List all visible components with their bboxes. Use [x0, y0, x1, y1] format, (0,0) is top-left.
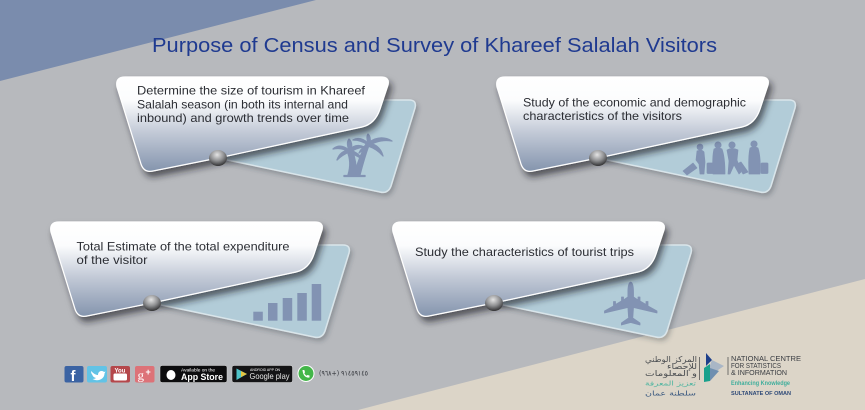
front panel [51, 222, 322, 316]
icon: facebook: f [70, 368, 76, 385]
text: tourism size: Salalah season (in both its internal and [137, 98, 348, 112]
icon: palm trees [333, 134, 392, 176]
knob [589, 150, 607, 166]
background corner: beige triangle [358, 279, 865, 410]
icon: google plus: + [146, 367, 151, 377]
text: visitor expenditure: of the visitor [76, 254, 148, 267]
background corner: blue triangle [0, 0, 316, 81]
text: tourist trips: Study the characteristics of tourist trips [415, 246, 634, 259]
panel: tourist trips [393, 222, 691, 337]
icon: youtube: You [114, 368, 126, 374]
title: Purpose of Census and Survey of Khareef Salalah Visitors [152, 35, 717, 57]
logo: English name [731, 354, 801, 377]
panel: tourism size [117, 77, 415, 192]
back panel [494, 245, 691, 337]
logo: Arabic tagline: تعزيز المعرفة [645, 380, 696, 388]
text: visitor characteristics: characteristics of the visitors [523, 110, 682, 123]
badge: google play: Google play [250, 371, 290, 381]
logo: emblem [700, 353, 728, 382]
icon: google plus: g [138, 368, 144, 382]
badge: app store [160, 366, 227, 382]
badge: google play: ANDROID APP ON [250, 368, 281, 372]
front panel [117, 77, 388, 171]
front panel [497, 77, 768, 171]
knob [143, 295, 161, 311]
text: visitor characteristics: Study of the economic and demographic [523, 96, 746, 110]
knob [485, 295, 503, 311]
logo: English name: NATIONAL CENTRE [731, 354, 801, 363]
logo: English name: & INFORMATION [731, 368, 787, 377]
icon: bar chart [253, 284, 321, 321]
contact number: (٩٦٨+) ٩١٤٥٩١٤٥ [319, 370, 368, 378]
badge: app store: Available on the [181, 368, 215, 374]
panel: visitor expenditure [51, 222, 349, 337]
back panel [152, 245, 349, 337]
icon: google plus [135, 366, 154, 382]
text: tourism size: Determine the size of tourism in Khareef [137, 84, 366, 98]
text: tourism size: inbound) and growth trends over time [137, 112, 349, 125]
logo: English name: FOR STATISTICS [731, 361, 781, 370]
front panel [393, 222, 664, 316]
logo: English tagline: Enhancing Knowledge [731, 381, 791, 387]
logo: Arabic name: و المعلومات [645, 369, 697, 378]
back panel [218, 100, 415, 192]
panel: visitor characteristics [497, 77, 795, 192]
text: visitor expenditure: Total Estimate of the total expenditure [76, 240, 290, 254]
logo: Arabic name: المركز الوطني [645, 355, 697, 364]
icon: travellers [683, 141, 768, 175]
icon: youtube [110, 366, 130, 382]
logo: Sultanate of Oman: SULTANATE OF OMAN [731, 391, 791, 397]
logo: Arabic country: سلطنة عمان [645, 390, 696, 398]
back panel [598, 100, 795, 192]
badge: google play [232, 366, 292, 382]
icon: twitter [87, 366, 107, 382]
logo: Arabic name [645, 355, 697, 378]
logo: National Centre for Statistics and Information [645, 353, 801, 398]
logo: Arabic name: للإحصاء [667, 362, 697, 372]
knob [209, 150, 227, 166]
icon: whatsapp [298, 366, 314, 382]
icon: facebook [64, 366, 84, 385]
badge: app store: App Store [181, 372, 223, 382]
social and contact bar [64, 366, 368, 385]
icon: airplane [604, 282, 657, 325]
